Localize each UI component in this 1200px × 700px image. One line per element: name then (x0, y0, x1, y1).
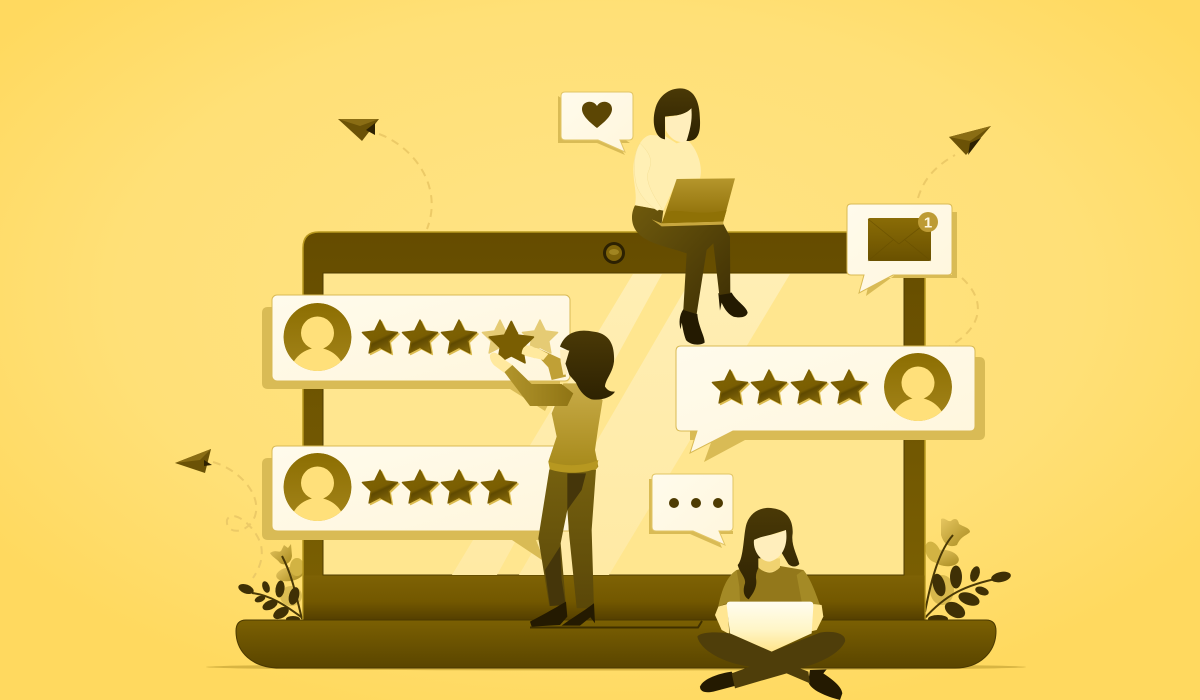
laptop (236, 232, 996, 668)
card shadow (262, 307, 560, 411)
lower bezel (304, 576, 924, 622)
woman sitting cross-legged with laptop (697, 508, 845, 700)
dashed flight paths (213, 134, 978, 578)
avatar (284, 453, 352, 521)
webcam (603, 242, 625, 264)
avatar (284, 303, 352, 371)
rating stars (362, 470, 518, 504)
icon: dots (669, 498, 723, 508)
card shadow (690, 357, 985, 462)
typing dots bubble (649, 474, 733, 548)
icon: paper plane left (175, 449, 212, 473)
laptop base (236, 620, 996, 668)
hair (738, 508, 799, 599)
face (665, 108, 692, 142)
floor shadow (206, 664, 1026, 670)
review card right (676, 346, 985, 462)
face (754, 530, 786, 562)
shirt (718, 565, 820, 607)
arm (634, 143, 662, 211)
hair (654, 88, 700, 141)
card body (272, 295, 570, 381)
sweater (633, 135, 701, 211)
front arm (504, 365, 573, 406)
heart bubble (558, 92, 633, 155)
far arm (522, 345, 566, 380)
back shoe (718, 293, 748, 317)
envelope bubble (847, 204, 957, 296)
shoes (530, 602, 567, 627)
arms (715, 604, 729, 634)
icon: envelope (868, 218, 931, 261)
pants (538, 469, 596, 608)
icon: paper plane top right (949, 126, 991, 155)
avatar (884, 353, 952, 421)
legs (697, 632, 845, 688)
dark star in hand (489, 321, 533, 363)
icon: heart (582, 102, 612, 128)
woman standing placing a star (489, 321, 615, 627)
hair (560, 331, 615, 400)
notification badge: 1 (924, 214, 932, 232)
rating stars (712, 370, 868, 404)
shoes (700, 672, 738, 692)
woman sitting on laptop (632, 88, 748, 345)
face sliver (560, 349, 569, 375)
torso (548, 383, 603, 473)
plant: left (237, 544, 305, 622)
pants (632, 205, 730, 314)
card shadow (262, 458, 560, 562)
base notch (530, 621, 702, 628)
card body (676, 346, 975, 453)
laptop lid frame (303, 232, 925, 622)
pants shadow (545, 473, 586, 606)
icon: paper plane top left (338, 119, 379, 141)
waistband (549, 460, 598, 473)
neck (758, 558, 780, 572)
rating stars (362, 320, 558, 354)
laptop (727, 602, 813, 652)
bubble shadow (866, 212, 957, 296)
sleeves (718, 570, 820, 607)
review card top left (262, 295, 570, 411)
front shoe (680, 309, 705, 345)
card body (272, 446, 569, 531)
review card bottom left (262, 446, 569, 562)
plant: right (922, 519, 1012, 623)
laptop screen (323, 273, 904, 575)
hands (490, 353, 512, 373)
bubble body (847, 204, 952, 293)
small laptop (652, 178, 735, 226)
